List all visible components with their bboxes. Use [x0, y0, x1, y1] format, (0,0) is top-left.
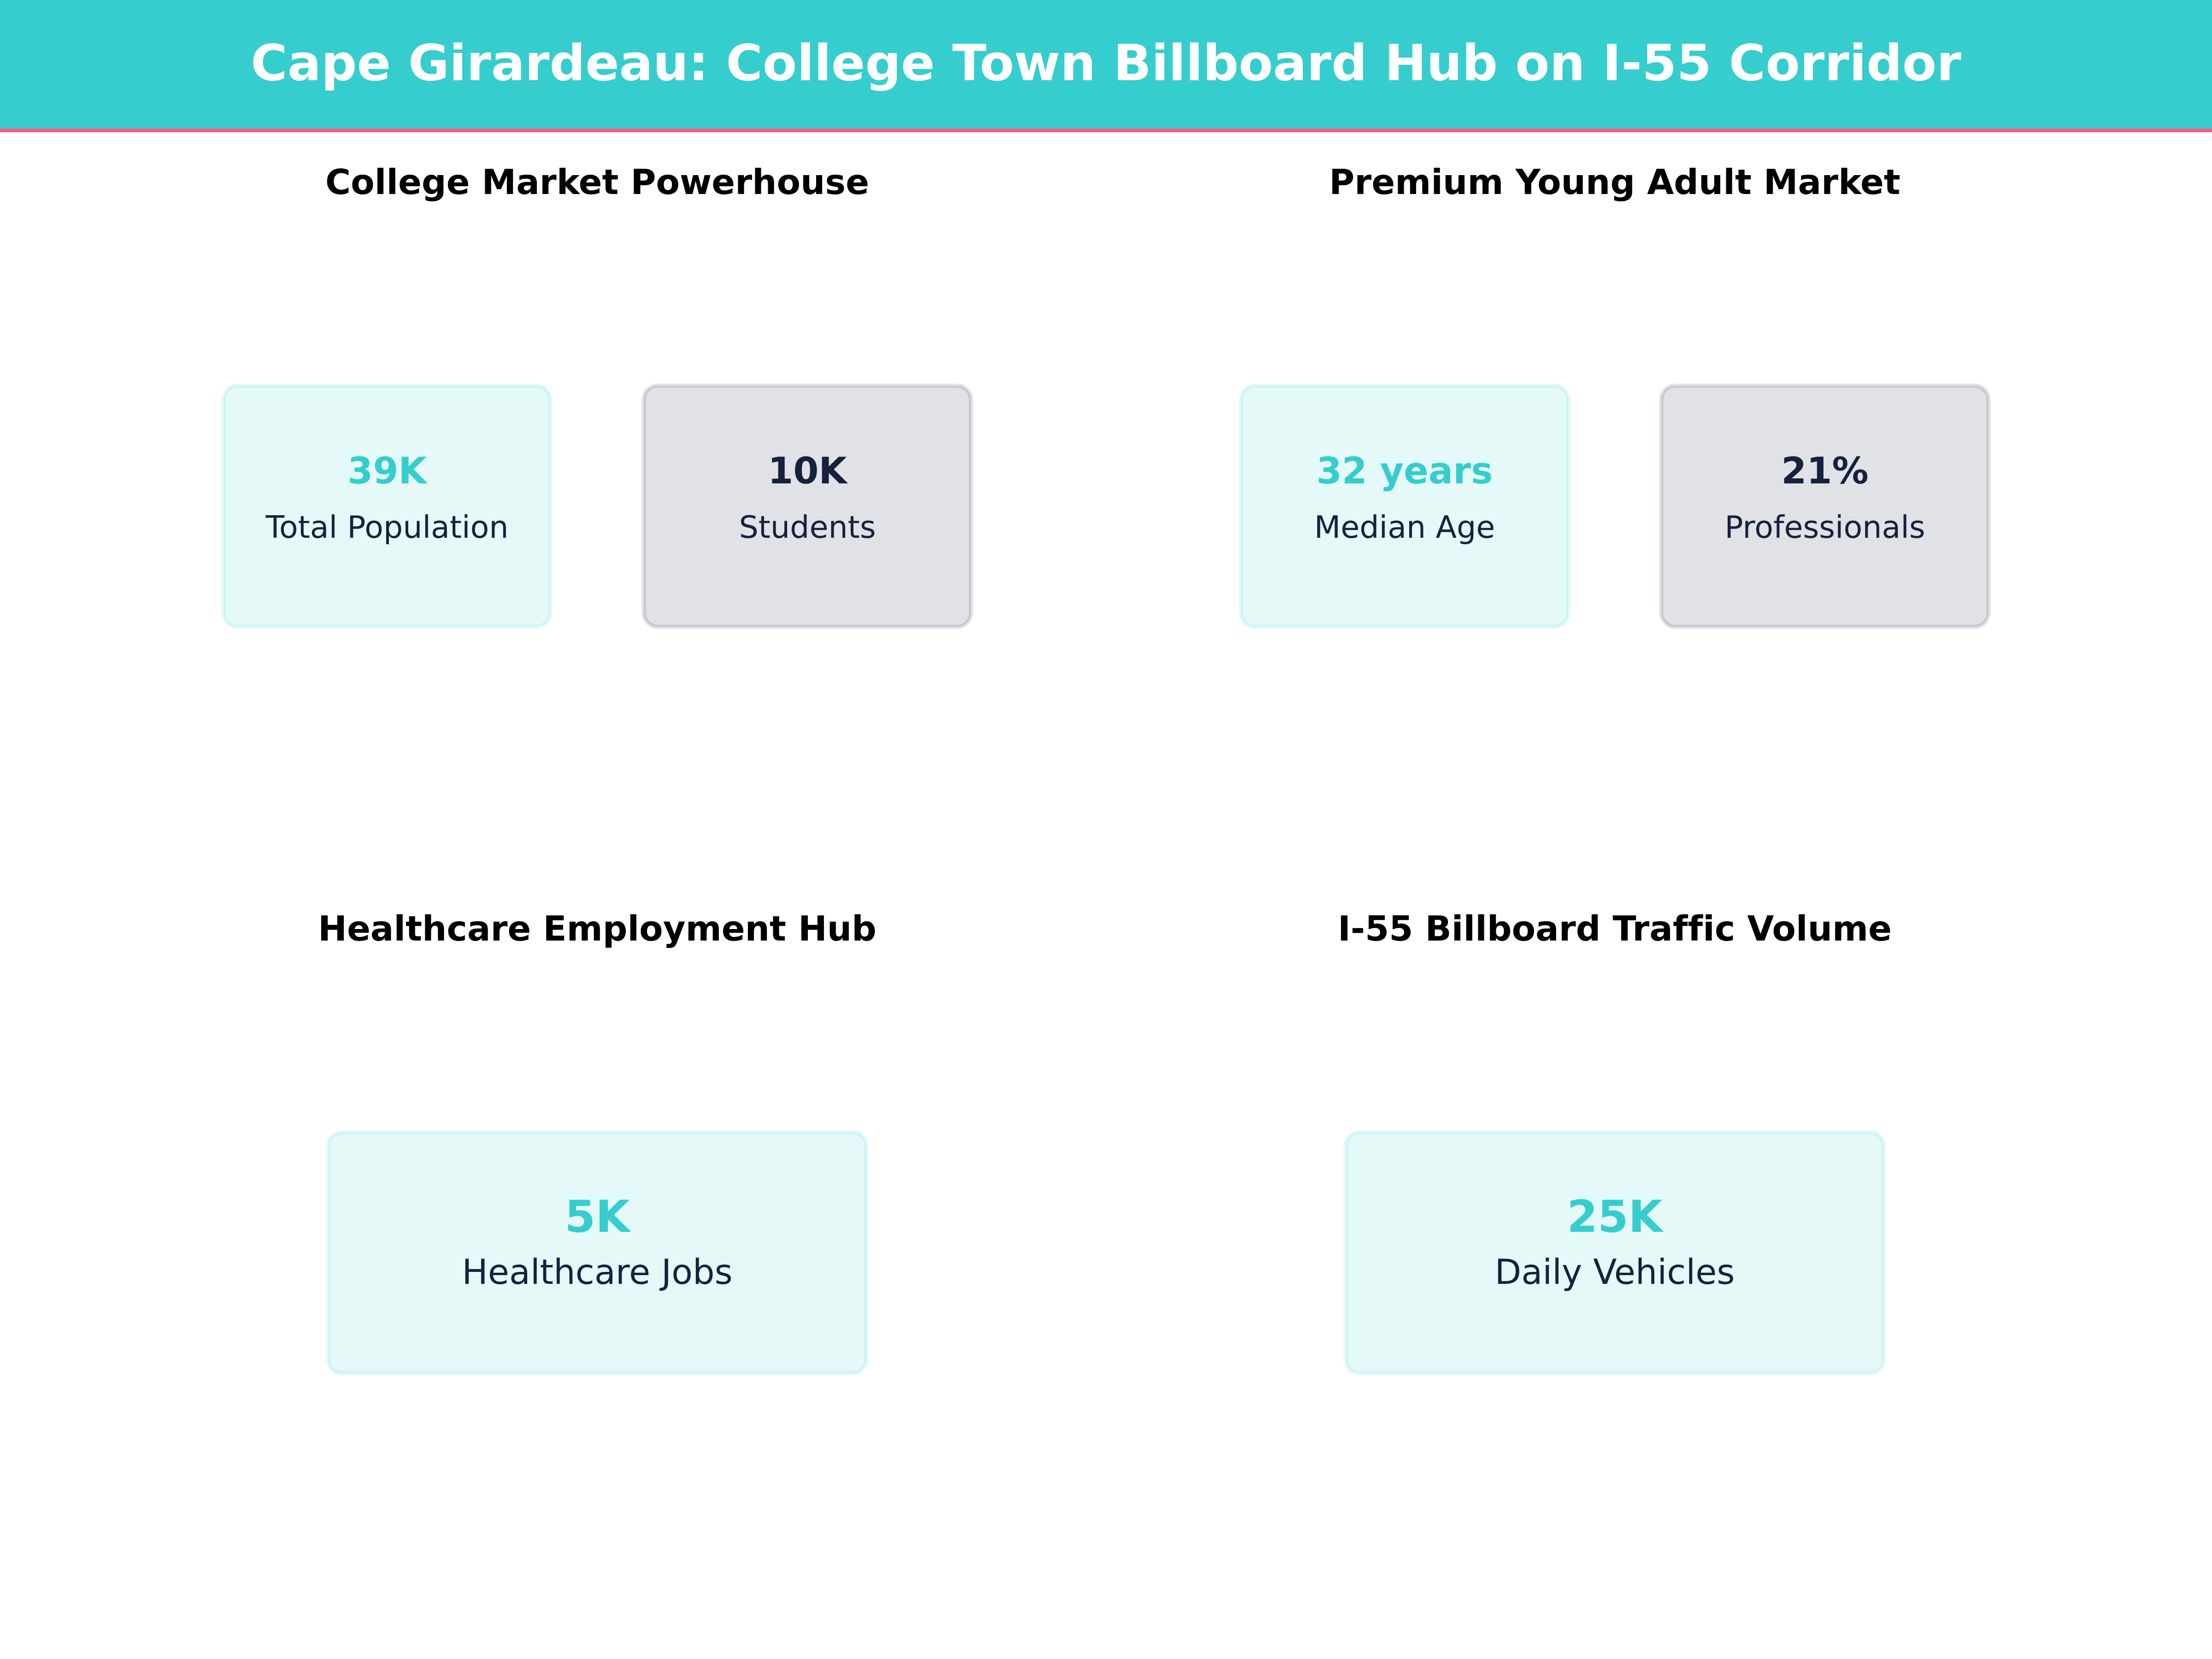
stat card: total population: Total Population	[265, 509, 509, 545]
heading: Premium Young Adult Market: Premium Young Adult Market	[1329, 162, 1900, 202]
stat card: students	[644, 386, 971, 627]
stat card: daily vehicles: Daily Vehicles	[1495, 1252, 1735, 1292]
header banner	[0, 0, 2212, 132]
stat card: median age: 32 years	[1317, 450, 1493, 492]
stat card: total population: 39K	[347, 450, 428, 492]
panel: I-55 Billboard Traffic Volume	[1338, 908, 1892, 1373]
stat card: healthcare jobs	[328, 1132, 866, 1373]
stat card: professionals	[1661, 386, 1988, 627]
heading: Healthcare Employment Hub: Healthcare Employment Hub	[318, 908, 877, 949]
stat card: healthcare jobs: Healthcare Jobs	[462, 1252, 733, 1292]
stat card: professionals: 21%	[1781, 450, 1869, 492]
heading: I-55 Billboard Traffic Volume: I-55 Billboard Traffic Volume	[1338, 908, 1892, 949]
stat card: median age	[1241, 386, 1568, 627]
panel: College Market Powerhouse	[224, 162, 971, 627]
stat card: total population	[224, 386, 550, 627]
stat card: healthcare jobs: 5K	[565, 1191, 631, 1242]
stat card: daily vehicles: 25K	[1567, 1191, 1665, 1242]
stat card: median age: Median Age	[1314, 509, 1495, 545]
stat card: daily vehicles	[1346, 1132, 1884, 1373]
stat card: students: Students	[739, 509, 876, 545]
stat card: students: 10K	[768, 450, 848, 492]
stat card: professionals: Professionals	[1724, 509, 1925, 545]
panel: Healthcare Employment Hub	[318, 908, 877, 1373]
title: Cape Girardeau: College Town Billboard Hub on I-55 Corridor	[251, 34, 1961, 92]
heading: College Market Powerhouse: College Market Powerhouse	[325, 162, 869, 202]
panel: Premium Young Adult Market	[1241, 162, 1988, 627]
